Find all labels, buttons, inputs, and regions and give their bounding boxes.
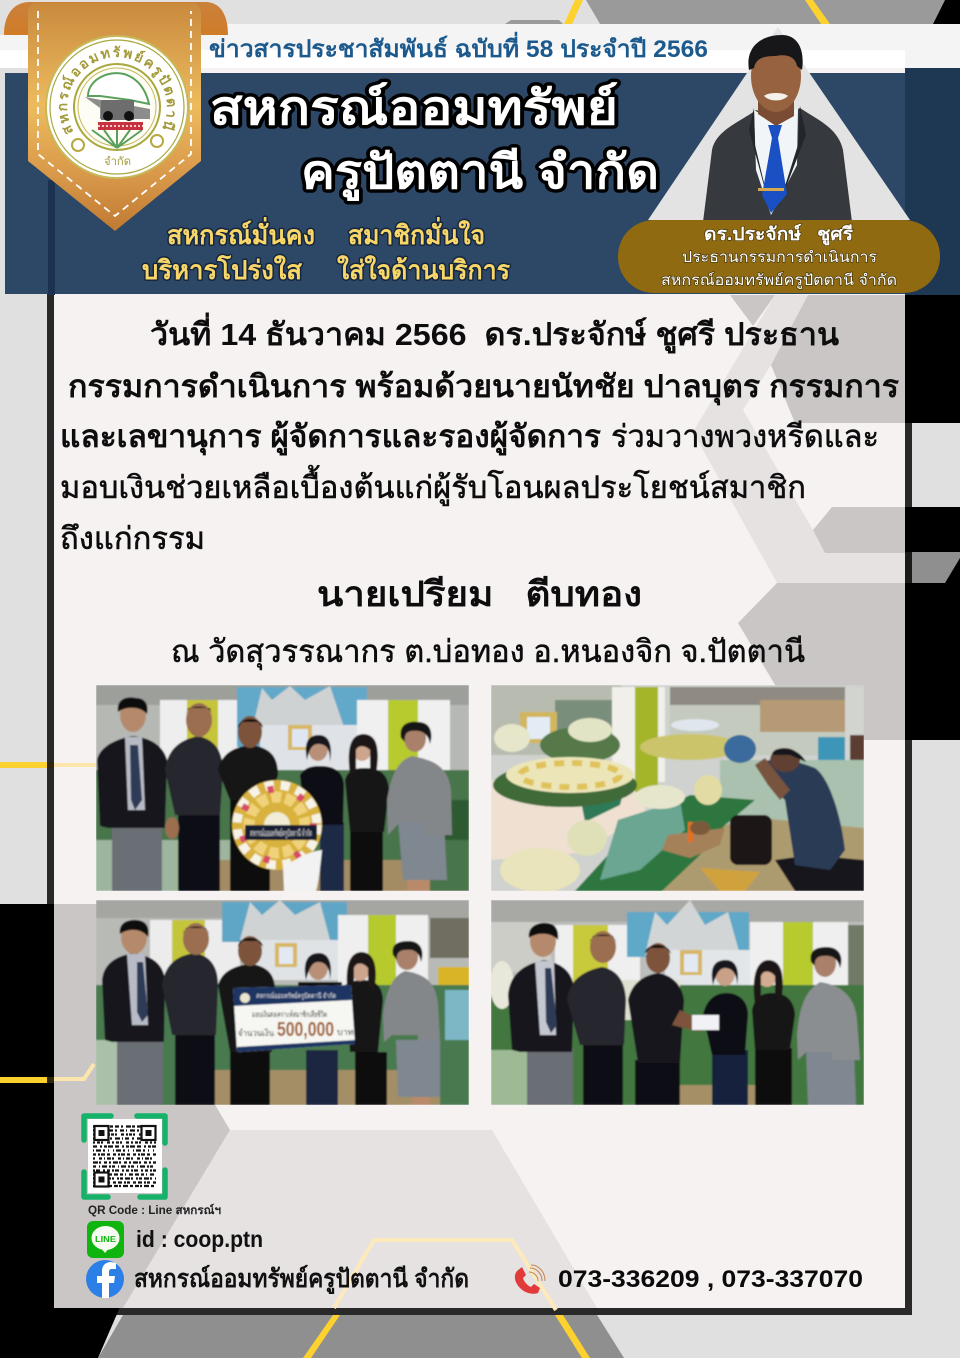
president portrait [648,27,910,222]
cheque board: สหกรณ์ออมทรัพย์ครูปัตตานี จำกัด [256,992,336,1000]
person 6 [387,722,452,891]
kneeling man [755,748,864,891]
ribbon with logo [4,2,228,231]
slogan: สมาชิกมั่นใจ [348,216,485,250]
announcement text: ร่วมวางพวงหรีดและ [611,419,879,454]
person 3 [218,936,275,1105]
announcement text: มอบเงินช่วยเหลือเบื้องต้นแก่ผู้รับโอนผลประโยชน์สมาชิก [60,465,806,506]
photo: donation cheque [96,900,469,1105]
card background shapes [54,295,905,1310]
shirt [754,108,798,215]
backdrop triangle [648,27,910,220]
header line: newsletter issue: ข่าวสารประชาสัมพันธ์ ฉบับที่ 58 ประจำปี 2566 [209,31,708,63]
QR caption: QR Code : Line สหกรณ์ฯ [88,1203,221,1217]
president name pill: สหกรณ์ออมทรัพย์ครูปัตตานี จำกัด [661,272,897,289]
suit [703,108,852,222]
announcement text: วันที่ 14 ธันวาคม 2566 ดร.ประจักษ์ ชูศรี ประธาน [150,312,839,354]
person 3 [218,716,278,891]
deceased member name: นายเปรียม ตีบทอง [317,575,642,614]
QR modules [93,1126,156,1186]
announcement text [60,312,899,556]
person 1 [508,923,574,1105]
tie [762,125,787,213]
person 5 [345,734,389,891]
person 1 [97,697,167,891]
title: cooperative name: ครูปัตตานี จำกัด [301,145,659,202]
slogan [142,216,510,285]
icon: facebook [86,1260,124,1298]
logo seal: จำกัด [104,156,131,168]
wreath [232,780,322,891]
person 6 [797,947,860,1105]
slogan: บริหารโปร่งใส [142,254,302,285]
cheque board: มอบเงินสงเคราะห์สมาชิกเสียชีวิต [252,1009,327,1019]
logo seal: สหกรณ์ออมทรัพย์ครูปัตตานี [58,46,176,134]
person 5 [345,952,387,1105]
person 4 [298,953,342,1105]
phone numbers: 073-336209 , 073-337070 [558,1266,863,1293]
president name pill: ประธานกรรมการดำเนินการ [682,249,877,266]
cheque board: บาท [337,1027,354,1037]
slogan: ใส่ใจด้านบริการ [337,255,510,285]
photo: wreath group [96,685,469,891]
person 5 [752,960,795,1105]
cheque board [233,985,355,1052]
person 2 [567,931,626,1105]
person 4 [703,960,748,1105]
ribbon stitching [38,11,191,216]
slogan: สหกรณ์มั่นคง [167,216,315,250]
title: cooperative name: สหกรณ์ออมทรัพย์ [210,81,618,134]
president name pill [618,220,940,293]
header band [5,68,960,295]
envelope [692,1015,719,1030]
person 4 [300,735,344,891]
person 3 [628,943,705,1105]
person 2 [165,703,223,891]
person 6 [383,941,440,1105]
ribbon curl [4,2,228,35]
icon: LINE [87,1221,124,1258]
icon: phone [515,1265,545,1294]
top white band [0,24,960,68]
ribbon body [28,3,201,231]
president name pill: ดร.ประจักษ์ ชูศรี [704,223,853,246]
cheque board: จำนวนเงิน [238,1028,274,1038]
hair [748,35,803,70]
neck and face [758,100,794,126]
announcement text: กรรมการดำเนินการ พร้อมด้วยนายนัทชัย ปาลบุตร กรรมการ [68,369,899,406]
photo: envelope handover [490,900,864,1105]
location: ณ วัดสุวรรณากร ต.บ่อทอง อ.หนองจิก จ.ปัตตานี [171,634,805,671]
QR finder patterns [94,1126,156,1186]
facebook page name: สหกรณ์ออมทรัพย์ครูปัตตานี จำกัด [134,1264,469,1295]
icon: LINE: LINE [95,1234,116,1244]
announcement text: ถึงแก่กรรม [60,521,205,556]
QR code [84,1116,165,1197]
person 2 [162,923,218,1105]
photo: kneeling tribute [491,685,864,892]
line id: id : coop.ptn [136,1226,263,1252]
person 1 [102,920,165,1105]
logo seal [45,35,189,179]
announcement text: และเลขานุการ ผู้จัดการและรองผู้จัดการ [60,419,601,456]
title: cooperative name [210,81,659,202]
cheque board: 500,000 [277,1019,334,1041]
wreath: สหกรณ์ออมทรัพย์ครูปัตตานี จำกัด [250,827,312,839]
QR green corners [84,1116,165,1197]
